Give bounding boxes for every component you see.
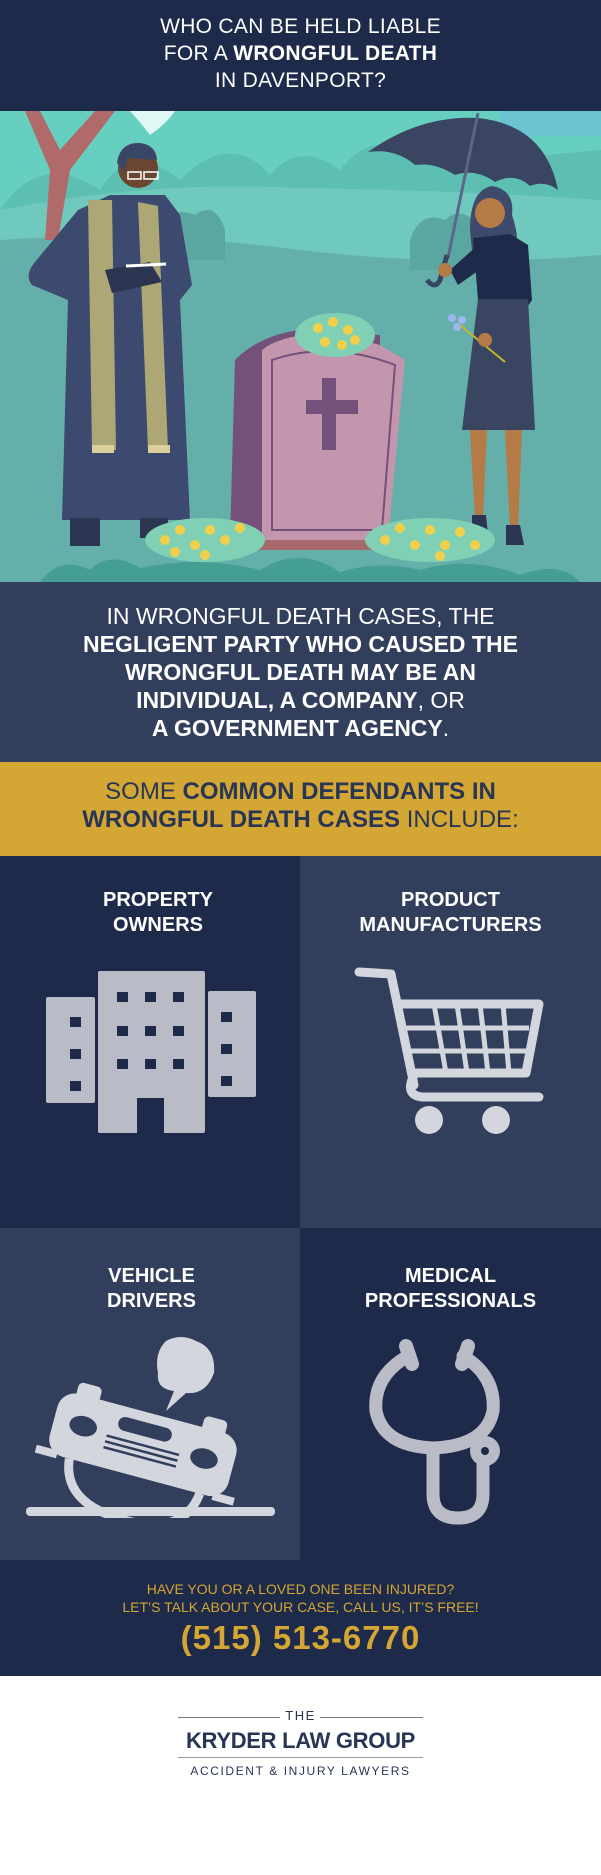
- icon: overturned car: [26, 1337, 275, 1518]
- label: PRODUCT: [401, 889, 500, 911]
- gold band: [0, 762, 601, 856]
- label: MEDICAL: [405, 1265, 496, 1287]
- illustration: funeral scene: [0, 111, 601, 582]
- tree: [25, 111, 115, 240]
- icon: shopping cart: [354, 968, 544, 1134]
- icon: buildings: [46, 971, 256, 1133]
- statement text: NEGLIGENT PARTY WHO CAUSED THE: [83, 631, 518, 657]
- band text: [82, 778, 519, 833]
- band text: SOME COMMON DEFENDANTS IN: [105, 778, 496, 805]
- statement text: A GOVERNMENT AGENCY.: [152, 715, 449, 741]
- panel: product manufacturers: [300, 856, 601, 1228]
- logo: [178, 1708, 423, 1778]
- panel: property owners: [0, 856, 300, 1228]
- statement panel: [0, 582, 601, 762]
- call to action: [0, 1560, 601, 1676]
- label: DRIVERS: [107, 1290, 196, 1312]
- statement text: WRONGFUL DEATH MAY BE AN: [125, 659, 476, 685]
- cta text: HAVE YOU OR A LOVED ONE BEEN INJURED?: [147, 1581, 454, 1597]
- header: [0, 0, 601, 111]
- label: [359, 889, 542, 936]
- logo: KRYDER LAW GROUP: [186, 1728, 415, 1753]
- statement text: IN WRONGFUL DEATH CASES, THE: [106, 603, 495, 629]
- cta text: LET’S TALK ABOUT YOUR CASE, CALL US, IT’S FREE!: [122, 1599, 479, 1615]
- tombstone: [230, 330, 405, 550]
- label: PROFESSIONALS: [365, 1290, 536, 1312]
- statement text: INDIVIDUAL, A COMPANY, OR: [136, 687, 465, 713]
- title: [160, 15, 441, 92]
- label: [365, 1265, 536, 1312]
- panel: vehicle drivers: [0, 1228, 300, 1560]
- title: WHO CAN BE HELD LIABLE: [160, 15, 441, 38]
- label: [103, 889, 213, 936]
- label: [107, 1265, 196, 1312]
- cta text: [122, 1581, 479, 1615]
- panel: medical professionals: [300, 1228, 601, 1560]
- title: IN DAVENPORT?: [215, 69, 386, 92]
- band text: WRONGFUL DEATH CASES INCLUDE:: [82, 806, 519, 833]
- title: FOR A WRONGFUL DEATH: [164, 42, 437, 65]
- label: PROPERTY: [103, 889, 213, 911]
- woman with umbrella: [368, 113, 558, 545]
- priest: [29, 143, 192, 546]
- label: OWNERS: [113, 914, 203, 936]
- phone number: (515) 513-6770: [181, 1619, 420, 1656]
- logo: ACCIDENT & INJURY LAWYERS: [190, 1764, 411, 1778]
- icon: stethoscope: [369, 1339, 500, 1524]
- statement text: [83, 603, 518, 741]
- label: VEHICLE: [108, 1265, 195, 1287]
- flowers: [145, 313, 495, 562]
- label: MANUFACTURERS: [359, 914, 542, 936]
- logo: THE: [285, 1708, 316, 1723]
